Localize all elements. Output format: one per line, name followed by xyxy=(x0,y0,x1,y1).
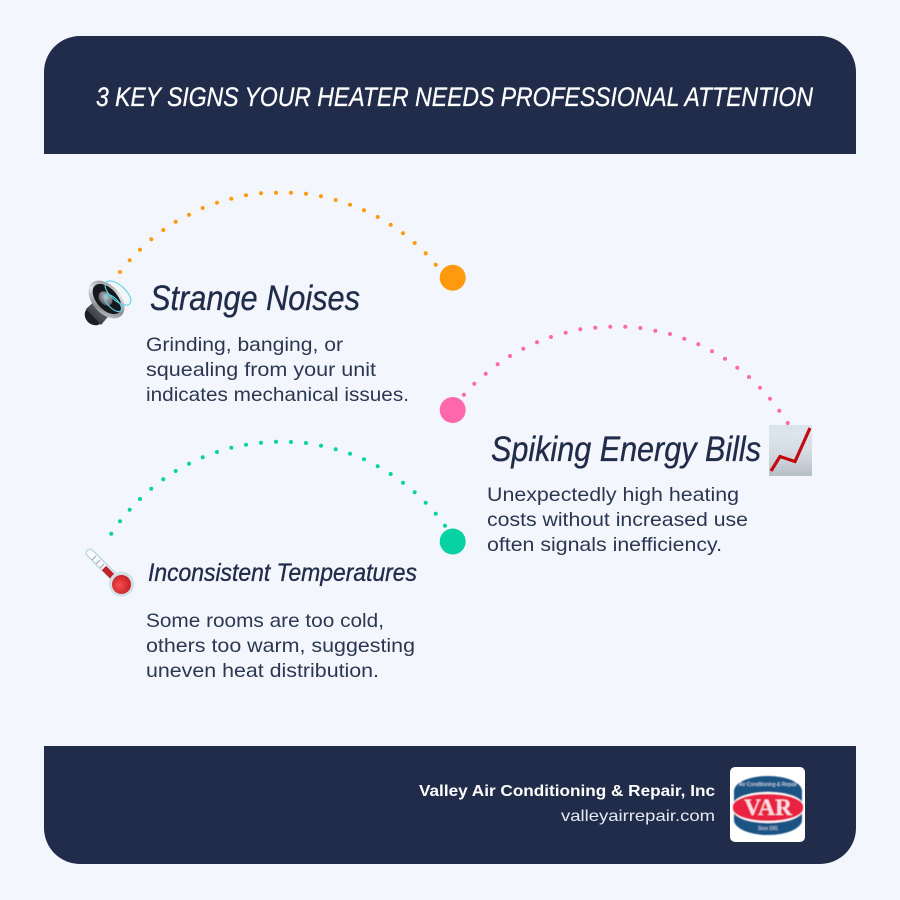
description: inconsistent temperatures xyxy=(146,610,415,682)
website: valleyairrepair.com xyxy=(561,808,715,825)
heading: spiking energy bills: Spiking Energy Bills xyxy=(491,430,761,469)
icon: rising chart xyxy=(769,425,812,476)
description: inconsistent temperatures: uneven heat distribution. xyxy=(146,660,379,682)
icon: thermometer xyxy=(90,553,134,596)
panel: strange noises xyxy=(81,274,409,406)
pink node xyxy=(440,397,466,423)
panel: inconsistent temperatures xyxy=(90,553,417,682)
dotted arc: pink xyxy=(440,327,788,423)
description: spiking energy bills: often signals inefficiency. xyxy=(487,534,722,556)
description: inconsistent temperatures: Some rooms are too cold, xyxy=(146,610,384,632)
logo xyxy=(730,767,805,842)
heading: strange noises: Strange Noises xyxy=(150,279,360,318)
description: strange noises: squealing from your unit xyxy=(146,359,377,381)
header band xyxy=(44,36,856,154)
heading: inconsistent temperatures: Inconsistent Temperatures xyxy=(148,559,417,587)
description: inconsistent temperatures: others too warm, suggesting xyxy=(146,635,415,657)
icon: speaker xyxy=(81,274,135,329)
logo: Air Conditioning & Repair xyxy=(739,782,797,788)
company name: Valley Air Conditioning & Repair, Inc xyxy=(419,783,715,800)
description: spiking energy bills: costs without increased use xyxy=(487,509,748,531)
dotted arc: orange xyxy=(120,193,466,291)
logo: Since 1991 xyxy=(758,826,778,832)
description: strange noises xyxy=(146,334,409,406)
footer band xyxy=(44,746,856,864)
teal node xyxy=(440,528,466,554)
dotted arc: teal xyxy=(111,442,466,554)
panel: spiking energy bills xyxy=(487,425,812,556)
description: strange noises: indicates mechanical issues. xyxy=(146,384,409,406)
description: spiking energy bills: Unexpectedly high heating xyxy=(487,484,739,506)
orange node xyxy=(440,265,466,291)
description: spiking energy bills xyxy=(487,484,748,556)
description: strange noises: Grinding, banging, or xyxy=(146,334,344,356)
logo: VAR xyxy=(744,795,792,820)
